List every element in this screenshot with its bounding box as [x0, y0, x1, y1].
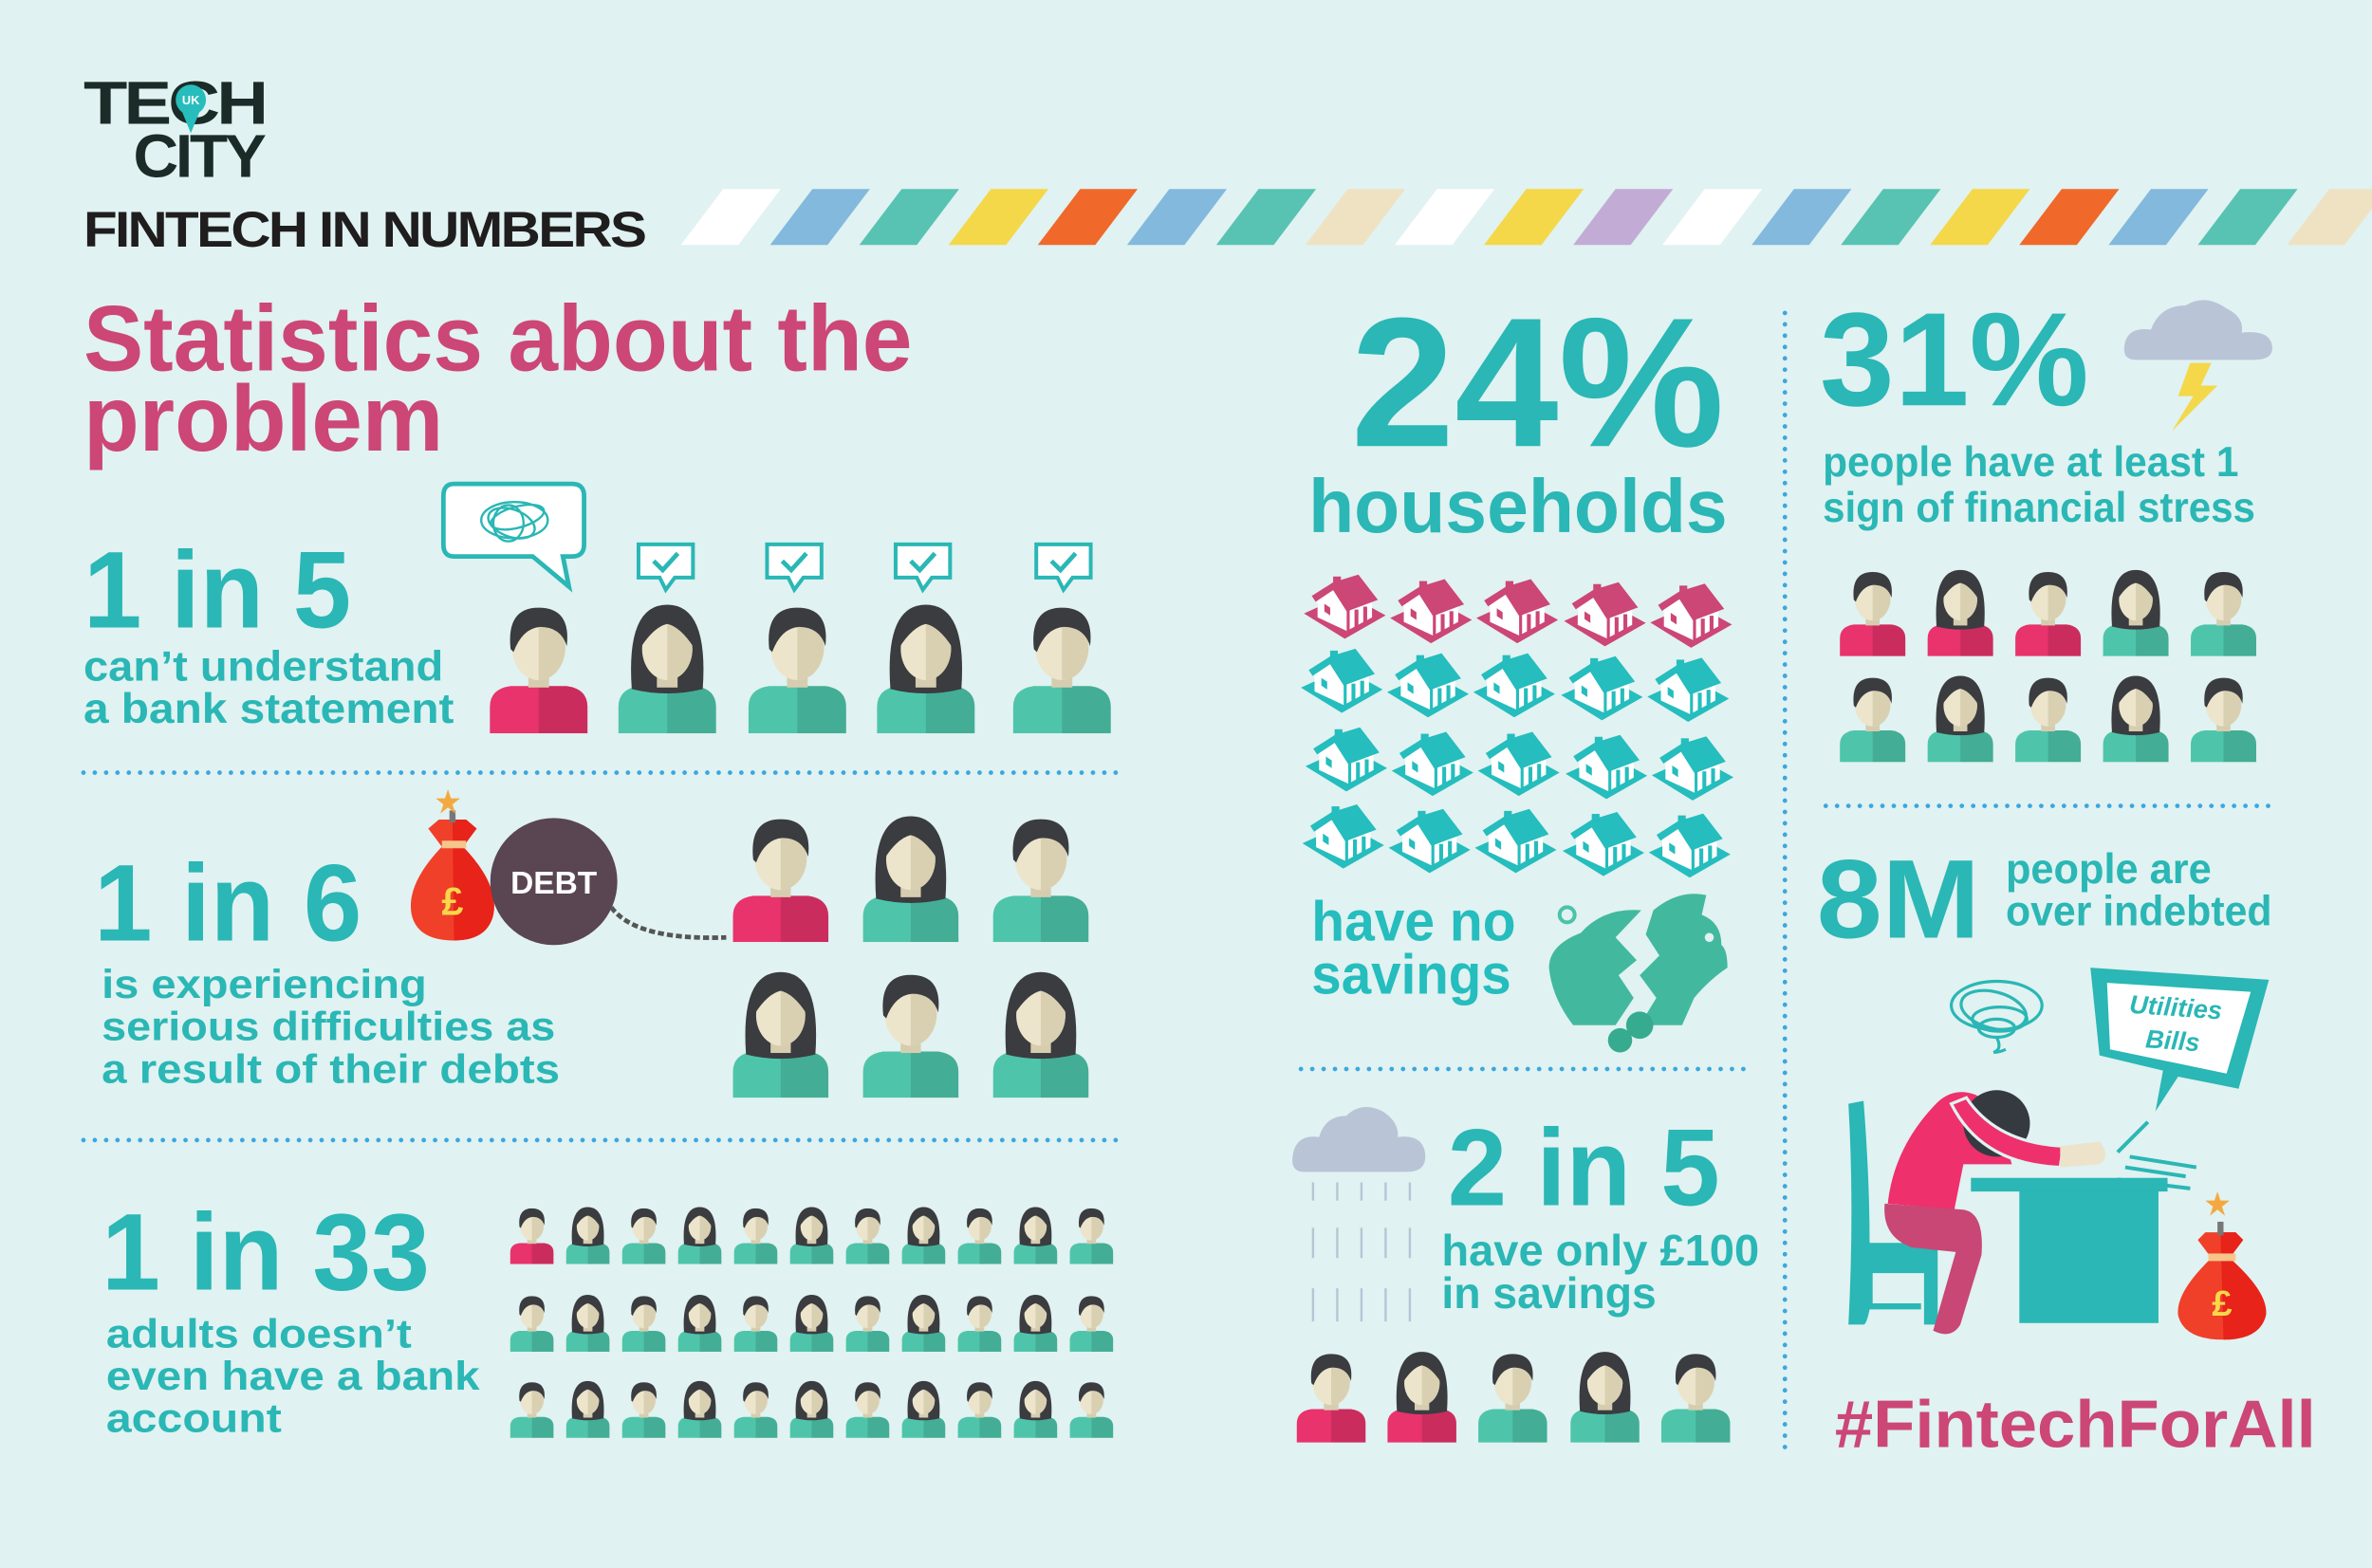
people grid: financial stress — [1840, 570, 2256, 762]
illustration: stressed person at desk with bills: Bills — [2144, 1024, 2201, 1057]
title: problem — [83, 366, 443, 470]
speech box — [2090, 968, 2269, 1112]
people: 2 in 5 row — [1297, 1352, 1730, 1443]
stat: 1 in 5: a bank statement — [83, 686, 454, 732]
icon: money bag with debt ball and chain — [411, 789, 726, 945]
stat: 1 in 5: 1 in 5 — [83, 530, 351, 652]
stat: 31% — [1820, 285, 2255, 531]
hashtag: #FintechForAll — [1835, 1387, 2316, 1461]
logo: Tech City UK: CITY — [134, 122, 266, 191]
stat: 31%: sign of financial stress — [1823, 485, 2255, 531]
logo: Tech City UK: TECH — [83, 69, 265, 138]
stat: 1 in 6: 1 in 6 — [94, 842, 361, 964]
illustration: stressed person at desk with bills: Utilities — [2128, 989, 2223, 1025]
illustration: stressed person at desk with bills — [1848, 968, 2269, 1334]
text: have no savings — [1311, 891, 1515, 1005]
stat: 8M over indebted — [1817, 836, 2272, 961]
stat: 2 in 5: in savings — [1441, 1268, 1657, 1318]
icon: money bag — [2177, 1191, 2266, 1339]
stat: 1 in 5 — [83, 530, 454, 732]
houses grid — [1301, 575, 1733, 877]
stat: 31%: people have at least 1 — [1823, 439, 2238, 486]
people: 1 in 5 row — [490, 605, 1111, 733]
header: Fintech in numbers: FINTECH IN NUMBERS — [83, 202, 646, 258]
stat: 24% households: 24% — [1351, 280, 1724, 486]
title: Statistics about the — [83, 286, 912, 391]
stat: 8M over indebted: 8M — [1817, 836, 1980, 961]
icon: check bubbles — [639, 544, 1091, 590]
title — [83, 286, 912, 470]
stat: 8M over indebted: people are — [2006, 846, 2212, 893]
stat: 31%: 31% — [1820, 285, 2089, 434]
scribble — [1952, 982, 2042, 1052]
people grid: 1 in 33 — [510, 1208, 1113, 1438]
stat: 8M over indebted: over indebted — [2006, 889, 2272, 935]
text: have no savings: have no — [1311, 891, 1515, 952]
icon: rain cloud — [1292, 1107, 1425, 1321]
stat: 1 in 6: serious difficulties as — [102, 1005, 555, 1050]
stat: 2 in 5: have only £100 — [1441, 1226, 1759, 1275]
stat: 1 in 33: account — [106, 1396, 282, 1442]
person — [1888, 1092, 2011, 1209]
text: have no savings: savings — [1311, 944, 1511, 1005]
stat: 24% households: households — [1308, 464, 1728, 548]
stat: 1 in 6: a result of their debts — [102, 1046, 560, 1092]
icon: confused speech bubble — [443, 484, 584, 586]
stat: 1 in 33: even have a bank — [106, 1354, 480, 1399]
logo: Tech City UK: UK — [182, 93, 200, 107]
desk — [1971, 1178, 2168, 1191]
stat: 1 in 6 — [94, 842, 560, 1092]
icon: broken piggy bank — [1549, 894, 1728, 1052]
chair — [1848, 1100, 1937, 1324]
icon: money bag with debt ball and chain: DEBT — [510, 866, 598, 901]
icon: storm cloud with lightning — [2124, 300, 2272, 431]
stat: 1 in 33: adults doesn’t — [106, 1311, 412, 1356]
decorative stripes band — [681, 189, 2372, 245]
stat: 1 in 5: can’t understand — [83, 643, 443, 690]
logo: Tech City UK — [83, 69, 266, 191]
icon: money bag with debt ball and chain: £ — [441, 878, 463, 923]
stat: 1 in 33 — [102, 1192, 480, 1442]
people: 1 in 6 group — [733, 817, 1088, 1098]
stat: 1 in 33: 1 in 33 — [102, 1192, 430, 1314]
stat: 2 in 5: 2 in 5 — [1448, 1107, 1720, 1228]
icon: money bag: £ — [2212, 1283, 2233, 1324]
stat: 24% households — [1308, 280, 1728, 548]
stat: 1 in 6: is experiencing — [102, 962, 427, 1007]
stat: 2 in 5 — [1441, 1107, 1759, 1318]
